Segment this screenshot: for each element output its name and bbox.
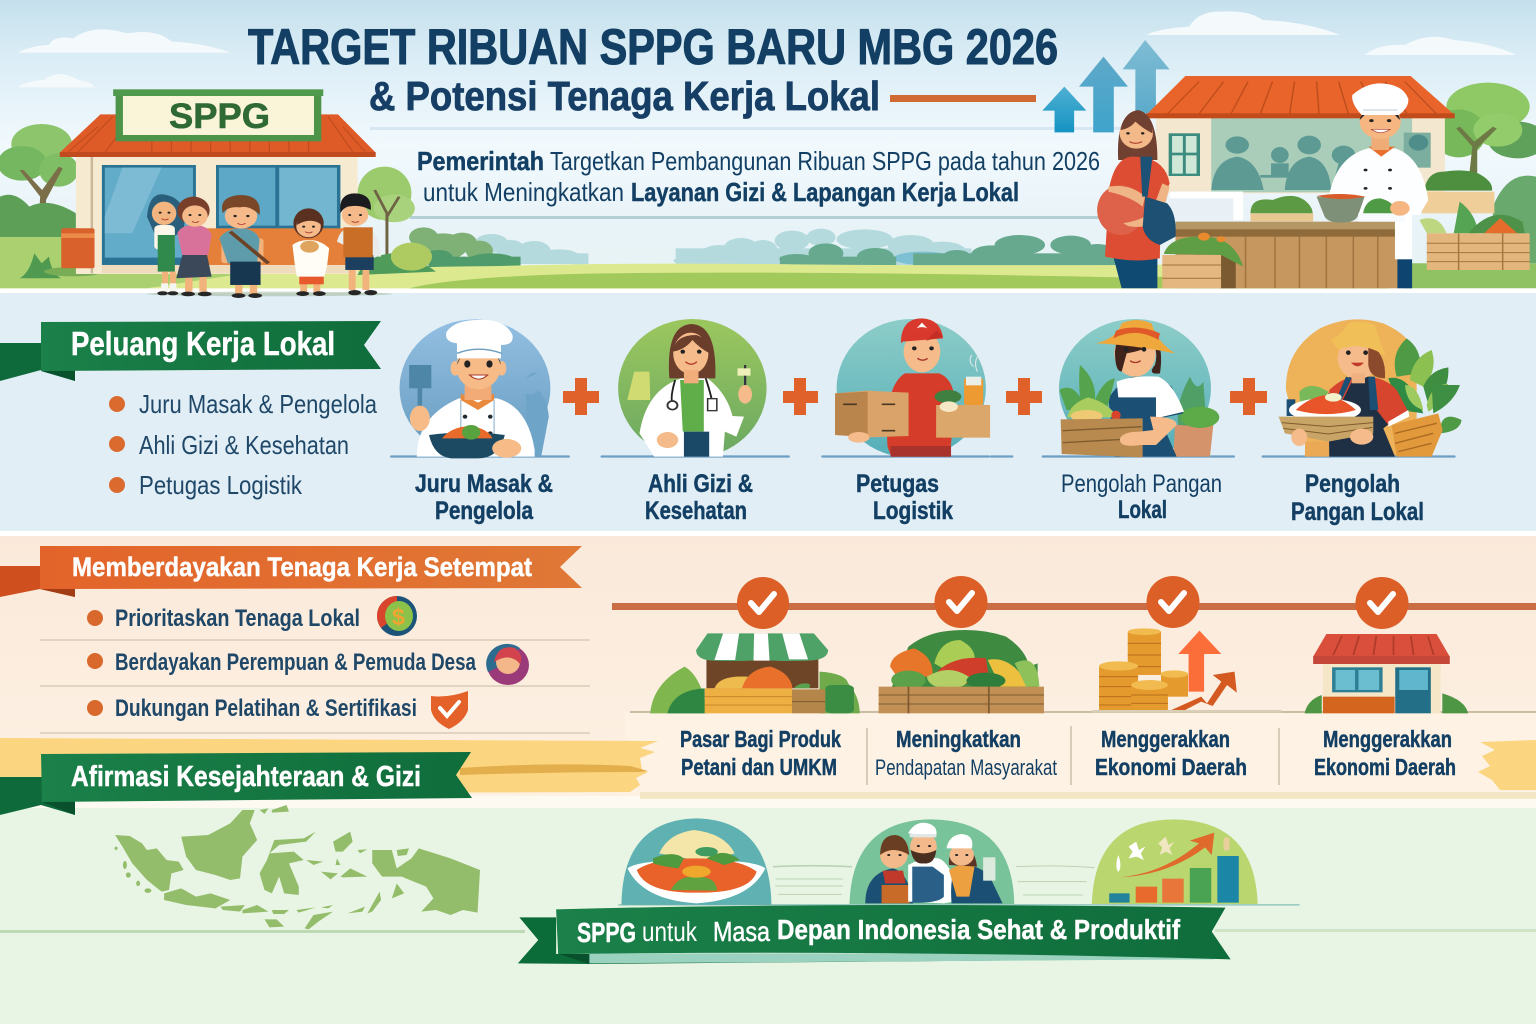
icon: shield check xyxy=(431,691,468,729)
subtitle: & Potensi Tenaga Kerja Lokal xyxy=(369,73,880,119)
text block: intro line 1: Pemerintah xyxy=(417,146,544,176)
label: Pengolah Pangan Lokal bold: Pangan Lokal xyxy=(1291,498,1424,526)
illustration: market stall xyxy=(650,633,860,713)
title: TARGET RIBUAN SPPG BARU MBG 2026 xyxy=(248,19,1058,75)
panel: header scene right xyxy=(1146,11,1536,288)
icon: coin xyxy=(377,596,417,636)
list: empowerment points: Berdayakan Perempuan & Pemuda Desa xyxy=(115,649,477,676)
label: Menggerakkan Ekonomi Daerah 1: Menggerakkan xyxy=(1101,726,1230,752)
illustration: chef at counter xyxy=(1317,83,1428,288)
decorative rule: orange accent line xyxy=(890,95,1036,102)
icon: nutritionist xyxy=(600,319,790,458)
label: Pasar Bagi Produk Petani dan UMKM xyxy=(680,726,841,780)
panel: Peluang Kerja Lokal xyxy=(0,321,381,500)
icon: growth arrows xyxy=(1042,40,1170,132)
text block: intro line 1: Targetkan Pembangunan Ribuan SPPG pada tahun 2026 xyxy=(550,146,1100,176)
label: Meningkatkan Pendapatan Masyarakat xyxy=(875,726,1057,780)
icon: logistics courier xyxy=(821,318,990,458)
label: Pengolah Pangan Lokal: Lokal xyxy=(1118,496,1167,524)
label: Petugas Logistik xyxy=(856,470,953,525)
ribbon heading: Memberdayakan xyxy=(0,546,582,597)
icon: woman xyxy=(486,644,529,685)
label: Menggerakkan Ekonomi Daerah 2 xyxy=(1314,726,1456,780)
label: Pasar Bagi Produk Petani dan UMKM: Pasar Bagi Produk xyxy=(680,726,841,752)
banner: closing message: untuk xyxy=(642,916,698,947)
text block: intro line 2: Layanan Gizi & Lapangan Kerja Lokal xyxy=(631,177,1019,207)
decorative rule: footer line xyxy=(0,929,1536,933)
illustration: vegetable crate xyxy=(879,630,1044,713)
text block: intro line 2 xyxy=(423,177,1019,207)
label: Juru Masak & Pengelola: Pengelola xyxy=(435,497,534,525)
label: Menggerakkan Ekonomi Daerah 1: Ekonomi Daerah xyxy=(1095,754,1247,780)
label: Juru Masak & Pengelola xyxy=(415,470,553,525)
label: Ahli Gizi & Kesehatan: Ahli Gizi & xyxy=(648,470,753,498)
ribbon heading: Memberdayakan: Memberdayakan Tenaga Kerja Setempat xyxy=(72,552,532,582)
label: Pengolah Pangan Lokal bold: Pengolah xyxy=(1305,470,1400,498)
icon: community workers xyxy=(849,819,1014,904)
label: Pengolah Pangan Lokal bold xyxy=(1291,470,1424,526)
text block: intro line 2: untuk Meningkatkan xyxy=(423,177,624,207)
label: Menggerakkan Ekonomi Daerah 2: Ekonomi Daerah xyxy=(1314,754,1456,780)
illustration: pregnant woman with bag xyxy=(1097,110,1176,288)
list: empowerment points: Prioritaskan Tenaga Lokal xyxy=(115,605,360,632)
decorative rule: timeline line xyxy=(612,603,1536,610)
panel: header scene left xyxy=(0,29,436,288)
list: local jobs xyxy=(109,389,377,500)
banner: closing message: Depan Indonesia Sehat & Produktif xyxy=(777,914,1181,945)
label: Petugas Logistik: Logistik xyxy=(873,497,953,525)
list: empowerment points: Dukungan Pelatihan & Sertifikasi xyxy=(115,695,417,722)
label: Ahli Gizi & Kesehatan: Kesehatan xyxy=(645,497,747,525)
banner: closing message: Masa xyxy=(713,916,770,947)
label: Petugas Logistik: Petugas xyxy=(856,470,939,498)
ribbon heading: Peluang Kerja Lokal: Peluang Kerja Lokal xyxy=(71,325,335,362)
banner: closing message xyxy=(518,905,1231,964)
icon: food processor with crate xyxy=(990,319,1235,458)
icon: plus signs xyxy=(563,378,1267,415)
illustration: SPPG kitchen and counter xyxy=(1146,76,1530,288)
text: SPPG sign: SPPG xyxy=(169,97,270,136)
label: Pengolah Pangan Lokal xyxy=(1061,470,1222,524)
map: Indonesia xyxy=(115,805,480,929)
list: local jobs: Petugas Logistik xyxy=(139,470,303,500)
icon: plate of food xyxy=(621,818,771,905)
icon: check badges xyxy=(737,576,1408,629)
panel: yellow brush band xyxy=(0,711,1536,799)
label: Ahli Gizi & Kesehatan xyxy=(645,470,753,525)
illustration: children xyxy=(147,193,392,298)
text block: intro line 1 xyxy=(417,146,1100,176)
ribbon heading: Peluang Kerja Lokal xyxy=(0,321,381,381)
list: empowerment points xyxy=(40,605,590,733)
panel: Memberdayakan Tenaga Kerja Setempat xyxy=(0,546,590,733)
label: Juru Masak & Pengelola: Juru Masak & xyxy=(415,470,553,498)
chart: rising bars xyxy=(1092,819,1258,904)
label: Pasar Bagi Produk Petani dan UMKM: Petani dan UMKM xyxy=(681,754,837,780)
decorative marks: connector lines xyxy=(618,866,1299,906)
icon: chef xyxy=(390,319,570,458)
label: Meningkatkan Pendapatan Masyarakat: Meningkatkan xyxy=(896,726,1021,752)
illustration: SPPG building xyxy=(60,89,376,274)
label: Meningkatkan Pendapatan Masyarakat: Pendapatan Masyarakat xyxy=(875,755,1057,780)
list: local jobs: Ahli Gizi & Kesehatan xyxy=(139,430,349,460)
icon: food processor with dish xyxy=(1262,319,1462,458)
icon: coin: $ xyxy=(392,604,405,630)
ribbon heading: Afirmasi Kesejahteraan & Gizi: Afirmasi Kesejahteraan & Gizi xyxy=(71,761,421,793)
ribbon heading: Afirmasi Kesejahteraan & Gizi xyxy=(0,752,472,815)
illustration: distant hills and ground xyxy=(2,227,1388,288)
illustration: small shop xyxy=(1305,634,1468,713)
label: Menggerakkan Ekonomi Daerah 2: Menggerakkan xyxy=(1323,726,1452,752)
label: Menggerakkan Ekonomi Daerah 1 xyxy=(1095,726,1247,780)
list: local jobs: Juru Masak & Pengelola xyxy=(139,389,377,419)
illustration: coins and growth arrow xyxy=(1092,628,1282,713)
label: Pengolah Pangan Lokal: Pengolah Pangan xyxy=(1061,470,1222,498)
banner: closing message: SPPG xyxy=(577,917,636,948)
